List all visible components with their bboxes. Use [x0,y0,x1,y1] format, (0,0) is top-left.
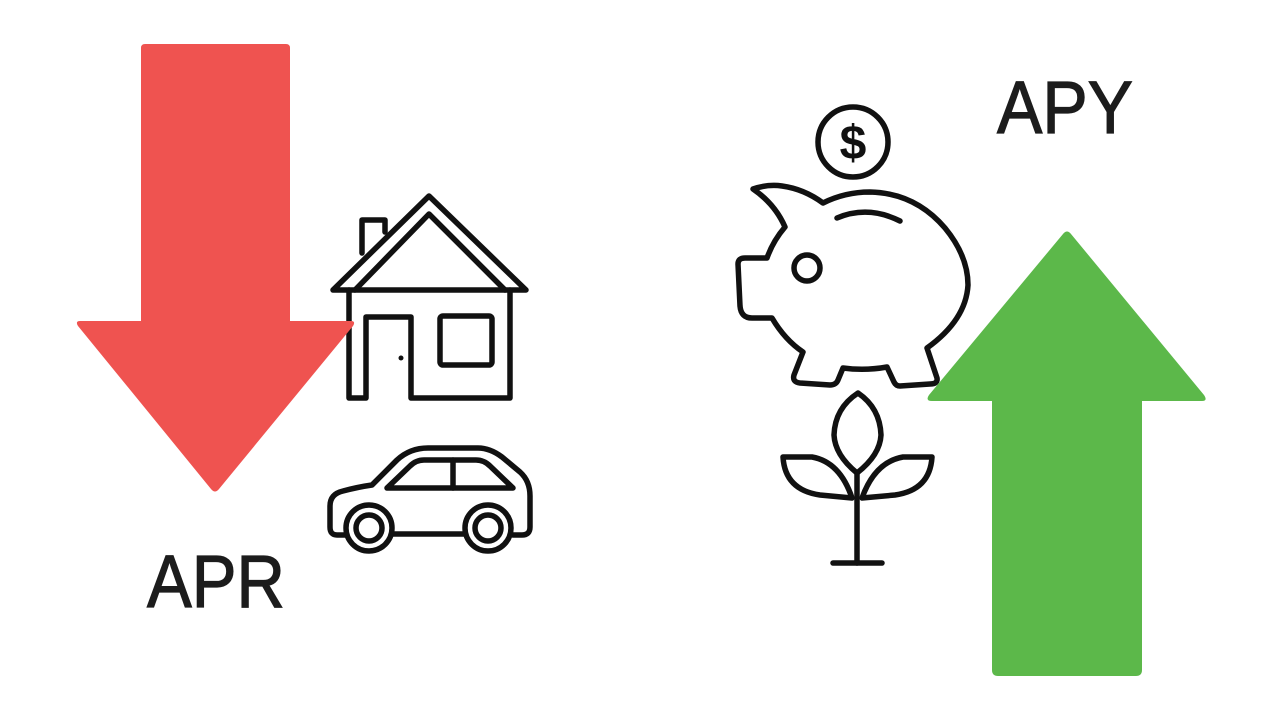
arrow: red down arrow [77,44,354,492]
label: APR: APR [147,540,285,623]
icon: plant sprout [783,393,932,563]
icon: car [330,448,530,551]
icon: dollar coin [818,107,888,177]
arrow: green up arrow [928,232,1206,676]
icon: piggy bank [738,185,968,386]
label: APY: APY [997,66,1133,149]
icon: house [333,196,526,398]
icon: dollar coin: $ [840,117,867,170]
